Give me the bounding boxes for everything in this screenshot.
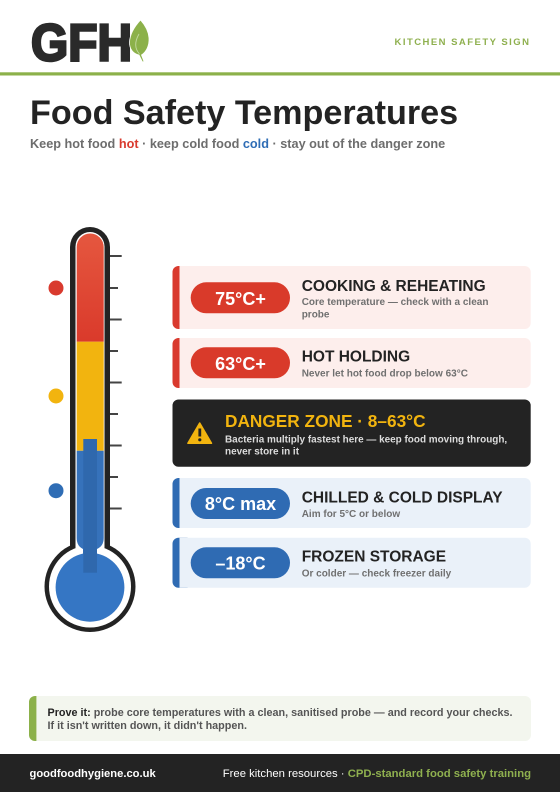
title: Food Safety Temperatures <box>30 94 458 132</box>
website: goodfoodhygiene.co.uk <box>30 768 156 780</box>
subtitle: Keep hot food hot · keep cold food cold · stay out of the danger zone <box>30 137 445 151</box>
callout: prove it: probe core temperatures with a clean, sanitised probe — and record your checks. <box>94 707 513 719</box>
heading: COOKING & REHEATING <box>302 278 486 295</box>
temperature pill: –18°C <box>215 554 266 574</box>
footer <box>0 754 560 792</box>
thermometer outline <box>44 227 136 632</box>
panel: frozen storage <box>172 538 531 588</box>
callout: prove it: Prove it: <box>48 707 91 719</box>
icon: warning triangle <box>188 423 212 443</box>
temperature pill <box>191 488 290 519</box>
description: probe <box>302 310 330 321</box>
description: Or colder — check freezer daily <box>302 569 452 580</box>
temperature pill <box>191 282 290 313</box>
marker: cold <box>48 483 64 498</box>
tick marks <box>110 256 122 508</box>
marker: danger <box>48 388 64 404</box>
footer strapline: Free kitchen resources · CPD-standard food safety training <box>223 768 531 780</box>
panel: hot holding <box>172 338 531 388</box>
callout: prove it: If it isn't written down, it didn't happen. <box>48 720 247 732</box>
thermometer <box>44 227 136 632</box>
heading: HOT HOLDING <box>302 349 410 366</box>
temperature pill: 8°C max <box>205 494 276 514</box>
temperature pill: 75°C+ <box>215 289 266 309</box>
marker: hot <box>48 280 64 296</box>
temperature pill <box>191 547 290 578</box>
description: Core temperature — check with a clean <box>302 297 488 308</box>
callout: prove it <box>29 696 531 741</box>
logo: GFH with leaf: GFH <box>31 14 132 72</box>
description: Bacteria multiply fastest here — keep food moving through, <box>225 434 507 445</box>
panel: chilled and cold display <box>172 478 531 528</box>
panel: cooking and reheating <box>172 266 531 329</box>
bulb <box>56 553 124 622</box>
sign label: KITCHEN SAFETY SIGN <box>394 37 530 48</box>
blue zone <box>77 451 104 560</box>
heading: FROZEN STORAGE <box>302 549 446 566</box>
description: Aim for 5°C or below <box>302 509 400 520</box>
temperature pill: 63°C+ <box>215 354 266 374</box>
temperature pill <box>191 347 290 378</box>
red zone <box>77 234 104 342</box>
description: never store in it <box>225 446 300 458</box>
panel: danger zone <box>172 400 531 467</box>
mercury stem <box>83 439 97 573</box>
heading: CHILLED & COLD DISPLAY <box>302 489 503 506</box>
amber zone <box>77 342 104 451</box>
description: Never let hot food drop below 63°C <box>302 369 468 380</box>
heading: DANGER ZONE · 8–63°C <box>225 411 426 431</box>
